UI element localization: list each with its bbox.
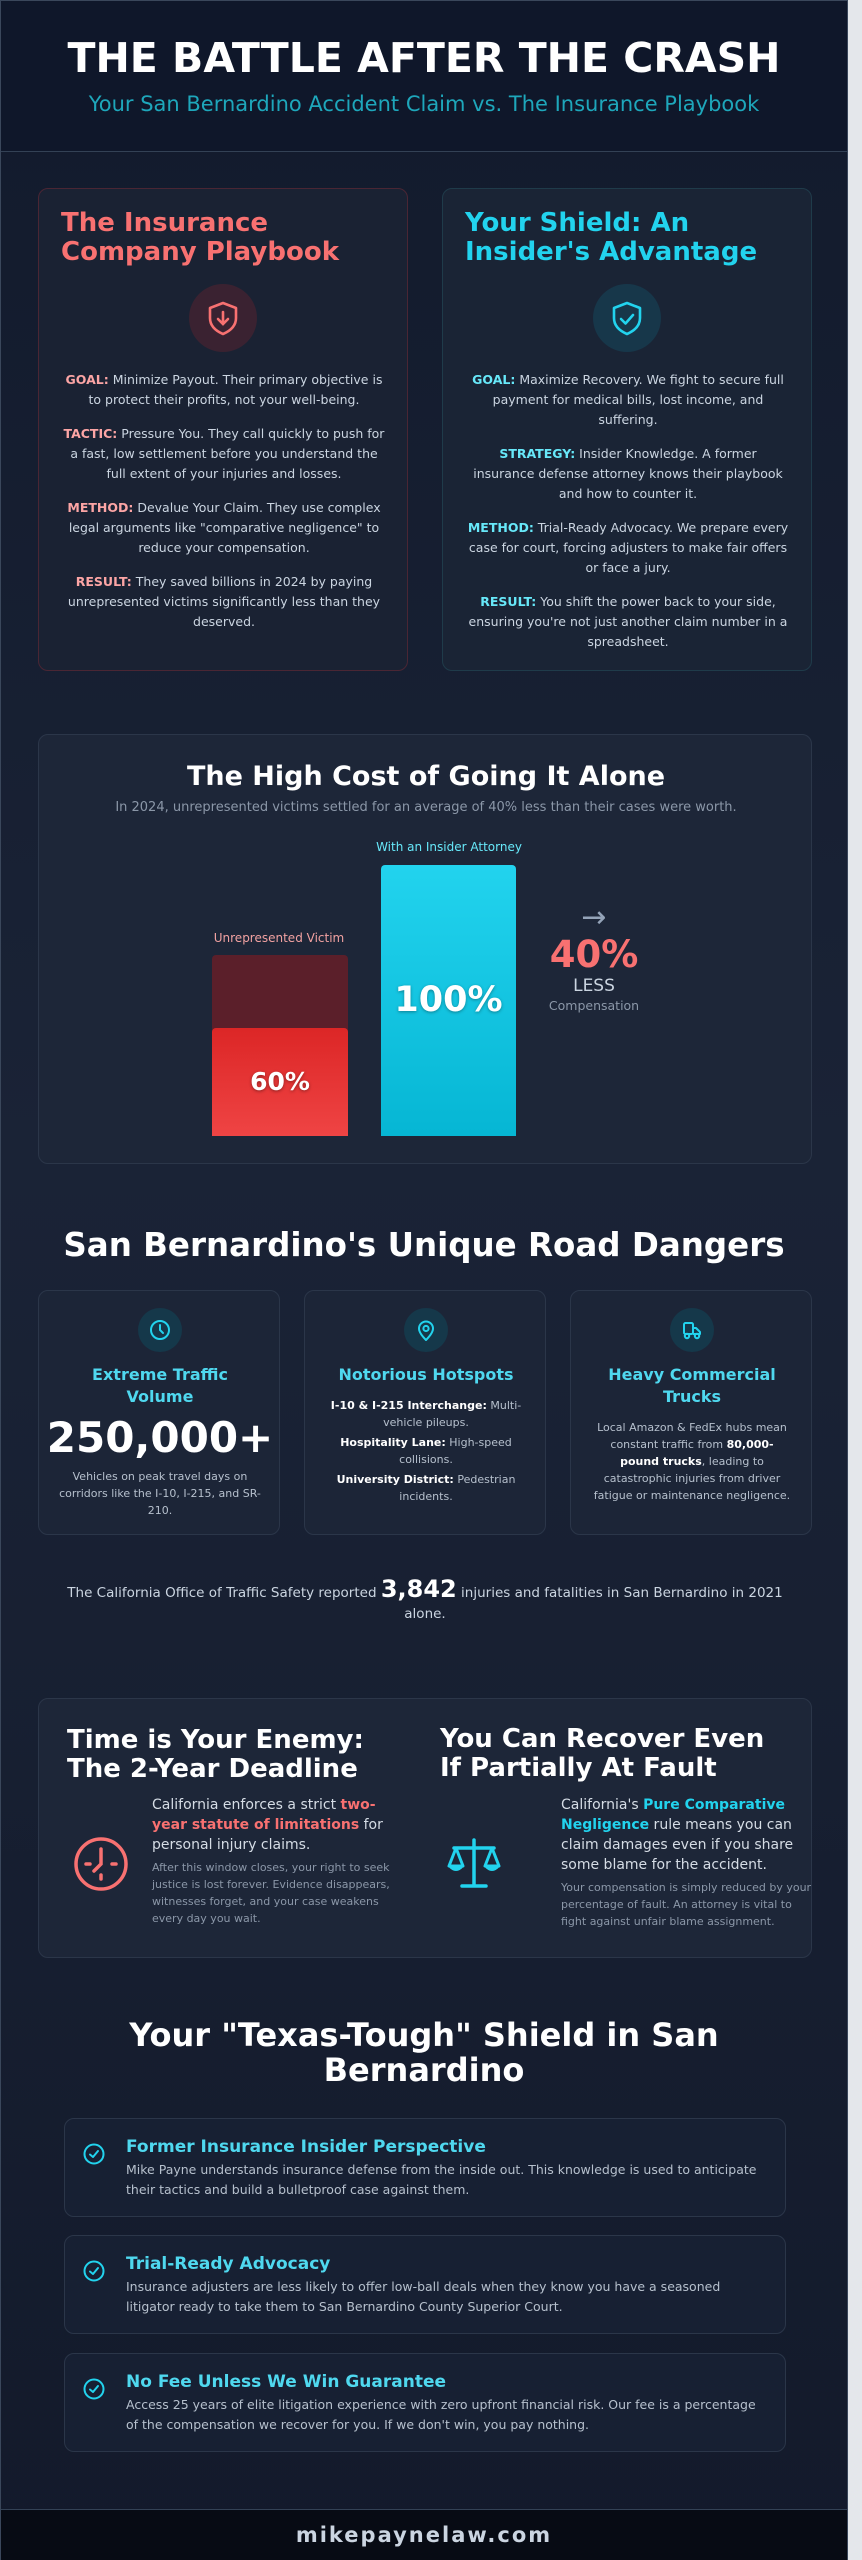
card: trucks (570, 1290, 812, 1535)
text (126, 2372, 756, 2432)
text: Local Amazon & FedEx hubs mean constant traffic from 80,000-pound trucks, leading to catastrophic injuries from driver fatigue or maintenance negligence. (594, 1421, 790, 1502)
panel: insurance playbook (38, 188, 408, 671)
label: unrepresented: Unrepresented Victim (214, 931, 344, 945)
icon: shield check (593, 284, 661, 352)
text: California's Pure Comparative Negligence rule means you can claim damages even if you share some blame for the accident. (561, 1797, 793, 1873)
callout: 40% less: → (581, 900, 607, 935)
heading: Volume (127, 1387, 193, 1406)
heading (61, 208, 340, 267)
text: Access 25 years of elite litigation experience with zero upfront financial risk. Our fee is a percentage of the compensation we recover for you. If we don't win, you pay nothing. (126, 2397, 756, 2432)
text (126, 2254, 720, 2314)
callout: 40% less: LESS (573, 976, 615, 996)
icon: scales (447, 1838, 500, 1888)
heading: road dangers: San Bernardino's Unique Road Dangers (63, 1226, 785, 1264)
text block: RESULT: They saved billions in 2024 by paying unrepresented victims significantly less than they deserved. (68, 574, 380, 629)
column: fault (440, 1724, 811, 1928)
bar: 100%: 100% (394, 980, 503, 1020)
card: hotspots (304, 1290, 546, 1535)
text (561, 1797, 811, 1928)
text block (64, 372, 384, 629)
text block: GOAL: Minimize Payout. Their primary objective is to protect their profits, not your well-being. (66, 372, 382, 407)
heading: Your Shield: An (465, 208, 689, 238)
heading (464, 208, 757, 267)
panel: deadline and fault (38, 1698, 812, 1958)
text: Insurance adjusters are less likely to offer low-ball deals when they know you have a seasoned litigator ready to take them to San Bernardino County Superior Court. (126, 2279, 720, 2314)
icon: check (84, 2378, 104, 2400)
heading (92, 1365, 228, 1406)
text: Hospitality Lane: High-speed collisions. (340, 1436, 512, 1466)
header (1, 1, 847, 152)
title: THE BATTLE AFTER THE CRASH (68, 34, 780, 82)
text (126, 2137, 756, 2197)
column: deadline (67, 1725, 390, 1925)
heading: If Partially At Fault (440, 1753, 717, 1783)
footer (1, 2509, 847, 2560)
text: University District: Pedestrian incidents. (337, 1473, 515, 1503)
heading (67, 1725, 364, 1784)
heading: texas-tough shield: Your "Texas-Tough" Shield in San Bernardino (129, 2016, 719, 2089)
text block (468, 372, 788, 649)
item: no fee (64, 2353, 786, 2452)
text: Your compensation is simply reduced by your percentage of fault. An attorney is vital to fight against unfair blame assignment. (561, 1881, 811, 1928)
callout: 40% less: Compensation (549, 998, 639, 1013)
text block: GOAL: Maximize Recovery. We fight to secure full payment for medical bills, lost income, and suffering. (472, 372, 784, 427)
subtitle: In 2024, unrepresented victims settled for an average of 40% less than their cases were worth. (115, 800, 737, 815)
text: After this window closes, your right to seek justice is lost forever. Evidence disappears, witnesses forget, and your case weakens every day you wait. (152, 1861, 390, 1925)
callout: 40% less: 40% (550, 933, 638, 976)
heading: The 2-Year Deadline (67, 1754, 358, 1784)
card: traffic volume (38, 1290, 280, 1535)
heading: Time is Your Enemy: (67, 1725, 364, 1755)
callout: 40% less (549, 900, 639, 1013)
heading: Notorious Hotspots (338, 1365, 514, 1384)
text (152, 1797, 390, 1925)
heading: You Can Recover Even (440, 1724, 764, 1754)
footer: mikepaynelaw.com (296, 2523, 552, 2547)
subtitle: Your San Bernardino Accident Claim vs. The Insurance Playbook (89, 92, 759, 116)
bar: 100% (381, 865, 516, 1136)
text (331, 1399, 521, 1503)
heading (608, 1365, 776, 1406)
bar chart (212, 840, 522, 1136)
heading: The High Cost of Going It Alone (187, 761, 665, 792)
text: I-10 & I-215 Interchange: Multi-vehicle pileups. (331, 1399, 521, 1429)
panel: high cost chart (38, 734, 812, 1164)
text: Vehicles on peak travel days on corridors like the I-10, I-215, and SR-210. (59, 1470, 261, 1517)
icon: truck (670, 1308, 714, 1352)
item: trial-ready (64, 2235, 786, 2334)
stat: 250,000+ (47, 1413, 273, 1462)
bar: 60% (212, 955, 348, 1136)
text block: METHOD: Devalue Your Claim. They use complex legal arguments like "comparative negligence" to reduce your compensation. (67, 500, 381, 555)
panel: your shield (442, 188, 812, 671)
icon: check (84, 2144, 104, 2164)
heading: Trucks (663, 1387, 721, 1406)
heading: Insider's Advantage (465, 237, 757, 267)
heading: The Insurance (61, 208, 268, 238)
heading (440, 1724, 764, 1783)
icon: clock (74, 1837, 128, 1891)
icon: clock (138, 1308, 182, 1352)
text: Former Insurance Insider Perspective (126, 2137, 486, 2157)
text: Mike Payne understands insurance defense from the inside out. This knowledge is used to anticipate their tactics and build a bulletproof case against them. (126, 2162, 756, 2197)
stat callout: 3,842: The California Office of Traffic Safety reported 3,842 injuries and fatalities in San Bernardino in 2021 alone. (67, 1575, 783, 1622)
item: insider perspective (64, 2118, 786, 2217)
text: Trial-Ready Advocacy (126, 2254, 330, 2274)
text: California enforces a strict two-year statute of limitations for personal injury claims. (152, 1797, 383, 1853)
text block: RESULT: You shift the power back to your side, ensuring you're not just another claim number in a spreadsheet. (469, 594, 787, 649)
text block: TACTIC: Pressure You. They call quickly to push for a fast, low settlement before you understand the full extent of your injuries and losses. (64, 426, 384, 481)
text block: STRATEGY: Insider Knowledge. A former insurance defense attorney knows their playbook and how to counter it. (473, 446, 783, 501)
heading: Extreme Traffic (92, 1365, 228, 1384)
icon: pin (404, 1308, 448, 1352)
heading: Company Playbook (61, 237, 339, 267)
icon: shield down (189, 284, 257, 352)
icon: check (84, 2260, 104, 2282)
text block: METHOD: Trial-Ready Advocacy. We prepare every case for court, forcing adjusters to make fair offers or face a jury. (468, 520, 788, 575)
heading: Heavy Commercial (608, 1365, 776, 1384)
label: attorney: With an Insider Attorney (376, 840, 522, 854)
bar: 60%: 60% (250, 1067, 310, 1096)
text: No Fee Unless We Win Guarantee (126, 2372, 446, 2392)
